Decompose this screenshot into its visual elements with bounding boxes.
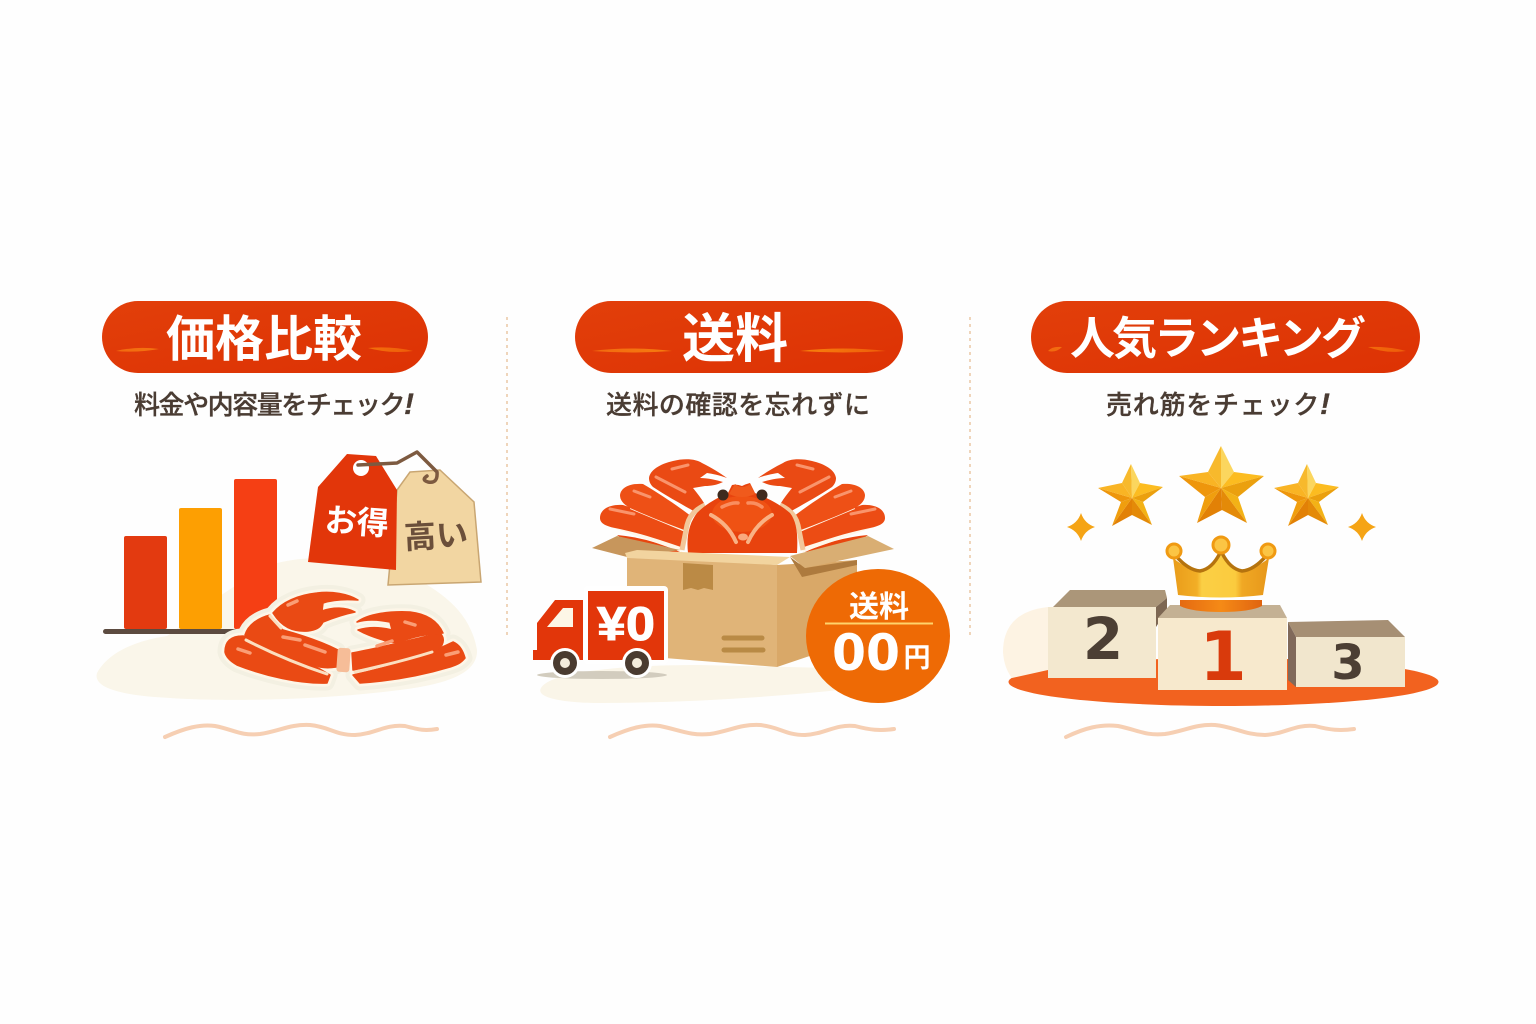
sparkle left (1067, 513, 1095, 541)
ground ellipse (1008, 658, 1438, 706)
panel: popularity ranking (1003, 301, 1438, 737)
heading pill: 送料: 送料 (682, 310, 788, 369)
podium 3: 3 (1331, 635, 1365, 691)
backdrop circle (1003, 607, 1048, 678)
crab (600, 459, 885, 553)
box marks (724, 638, 763, 650)
shell edges (246, 616, 432, 674)
crab claws (225, 592, 465, 683)
subtitle: 送料の確認を忘れずに (606, 390, 870, 420)
crown (1167, 537, 1275, 612)
delivery truck (533, 586, 668, 679)
eyes (718, 490, 728, 500)
bar chart (103, 479, 277, 634)
tape (683, 563, 713, 590)
podium 3 (1288, 620, 1405, 691)
panel: shipping (533, 301, 950, 737)
wavy line (165, 725, 437, 737)
ground blob (97, 558, 477, 700)
heading pill: 人気ランキング: 人気ランキング (1070, 313, 1366, 364)
tag string (358, 452, 437, 482)
heading pill: 送料 (575, 301, 903, 373)
wavy line (1066, 725, 1354, 737)
knuckle (336, 648, 351, 672)
shipping badge: 円 (904, 643, 930, 673)
price tag: お得: お得 (324, 502, 390, 542)
shipping badge (806, 569, 950, 703)
price tag: お得 (308, 454, 397, 570)
shipping badge: 送料 (849, 591, 909, 624)
ground blob (540, 665, 840, 703)
truck label: ¥0 (597, 597, 655, 650)
right star (1274, 464, 1339, 526)
heading pill: 価格比較: 価格比較 (166, 313, 362, 367)
body (687, 483, 797, 553)
podium 1 (1158, 605, 1287, 697)
price tag: 高い (388, 470, 481, 585)
shell highlights (238, 601, 458, 655)
cardboard box (592, 536, 894, 667)
price tag: 高い: 高い (403, 516, 469, 556)
divider: left (506, 317, 508, 636)
left star (1098, 464, 1163, 526)
wavy line (610, 725, 894, 737)
podium 2 (1048, 590, 1167, 678)
left legs (600, 459, 727, 552)
right legs (758, 459, 885, 552)
heading pill: 価格比較 (102, 301, 428, 373)
podium 2: 2 (1083, 605, 1123, 673)
panel: price comparison (97, 301, 481, 737)
sparkle right (1348, 513, 1376, 541)
divider: right (969, 317, 971, 636)
heading pill: 人気ランキング (1031, 301, 1420, 373)
subtitle: 料金や内容量をチェック! (134, 388, 414, 421)
center star (1179, 446, 1264, 523)
subtitle: 売れ筋をチェック! (1106, 388, 1330, 421)
podium 1: 1 (1199, 618, 1247, 697)
shipping badge: 00 (832, 624, 900, 682)
